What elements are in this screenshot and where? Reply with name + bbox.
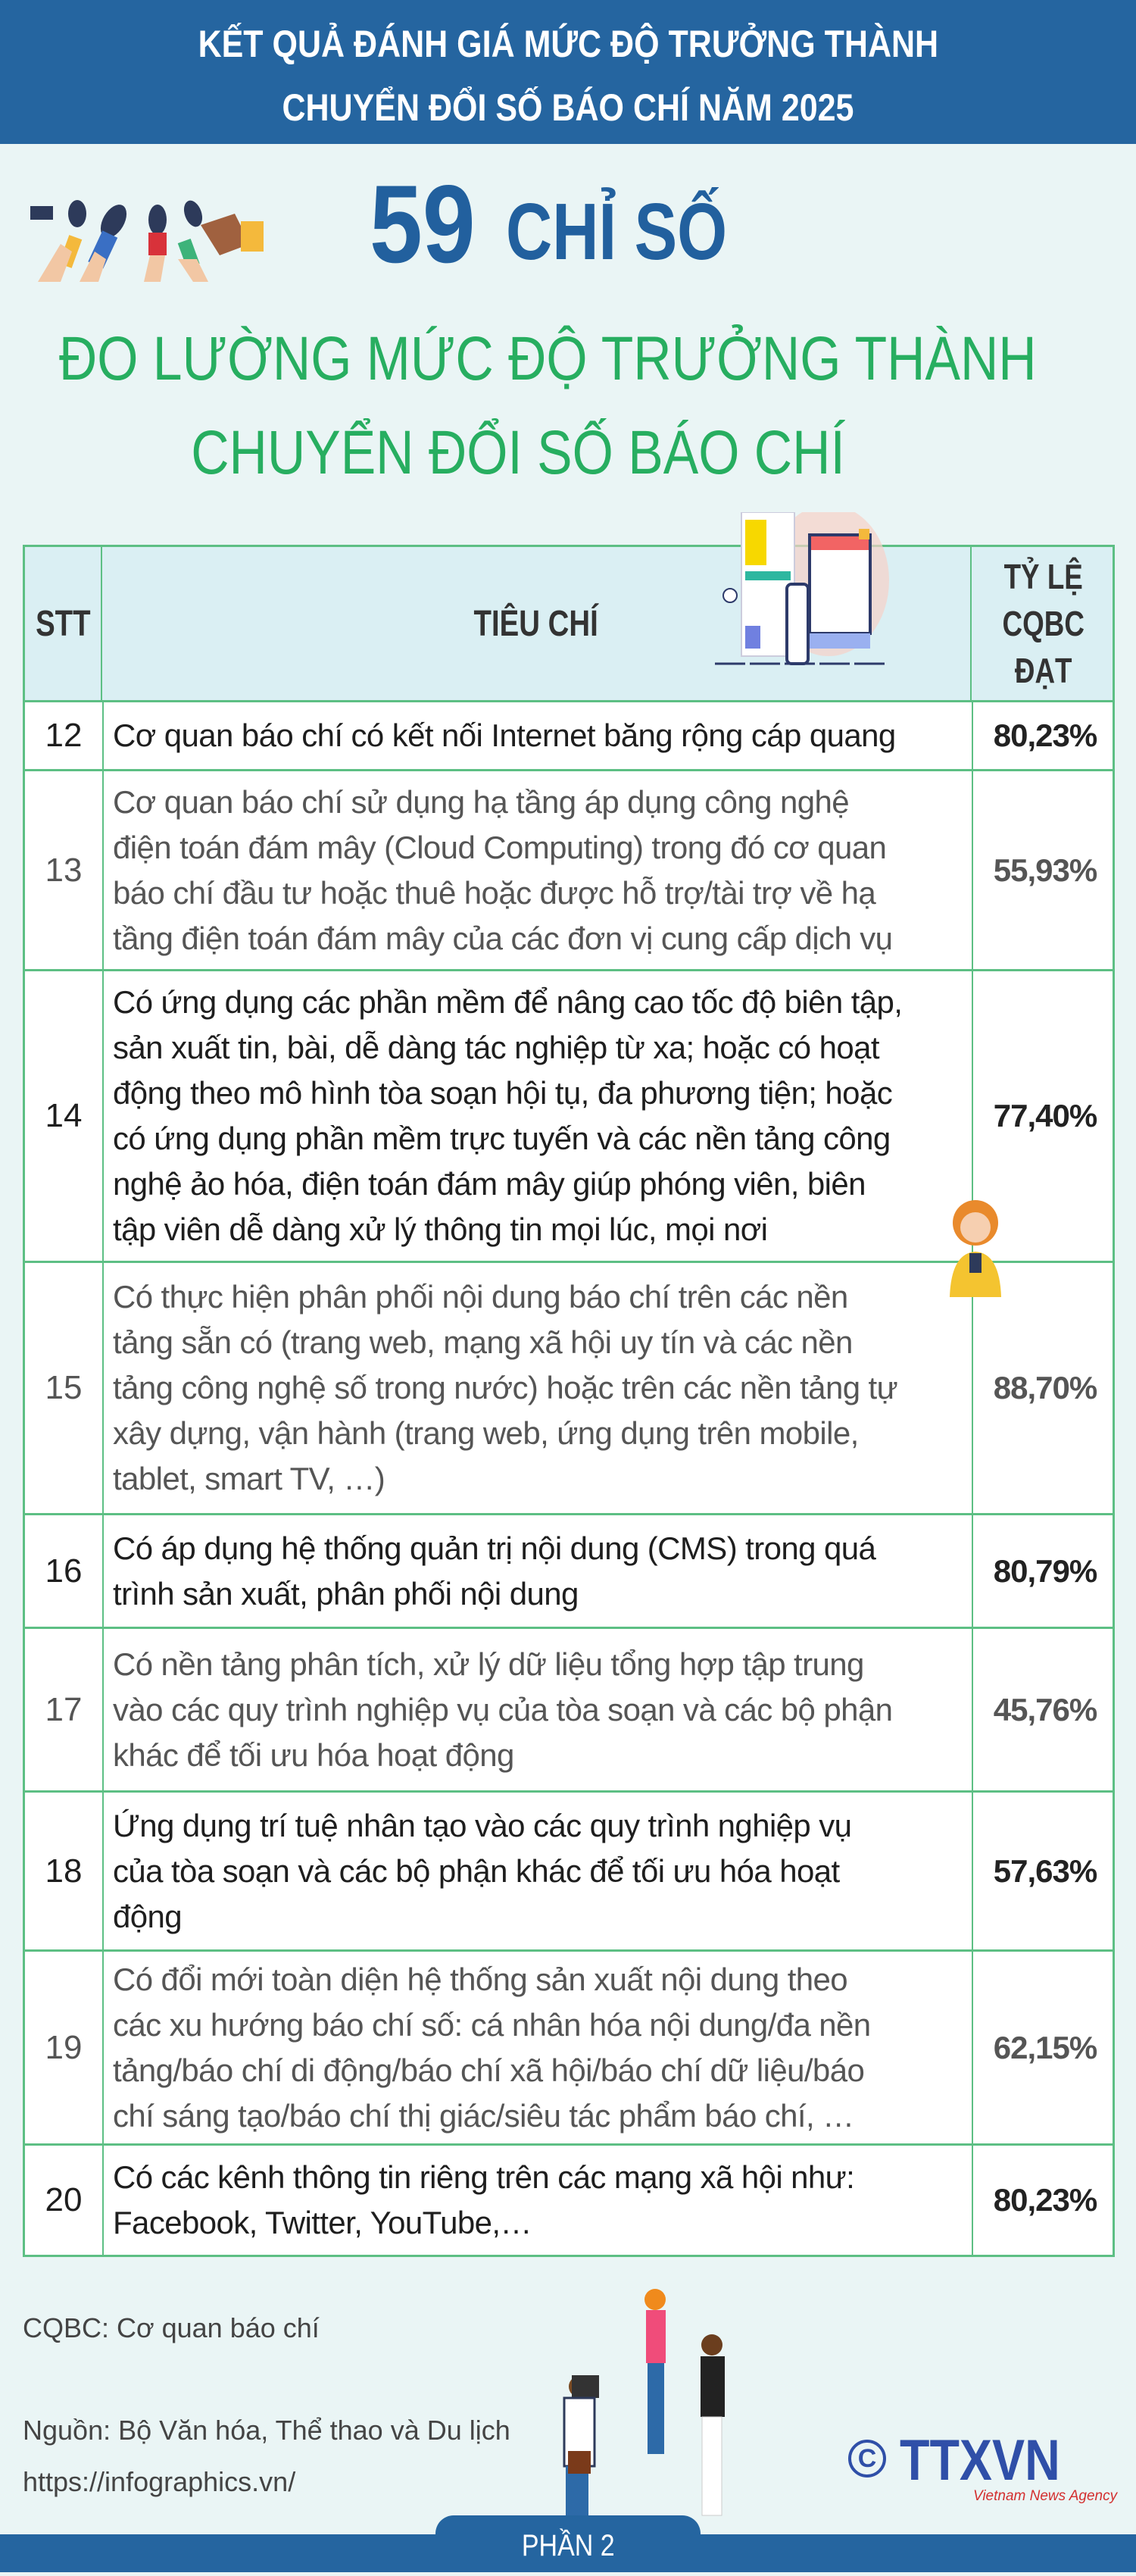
row 16: trình sản xuất, phân phối nội dung <box>113 1576 579 1611</box>
header: STT: STT <box>36 603 90 644</box>
row 19: 19 <box>45 2029 82 2065</box>
row 18: 18 <box>45 1852 82 1890</box>
subtitle green <box>59 324 1037 487</box>
source: Nguồn: Bộ Văn hóa, Thể thao và Du lịch <box>23 2415 510 2446</box>
row 12: 80,23% <box>994 717 1097 753</box>
row 20: Có các kênh thông tin riêng trên các mạng xã hội như: <box>113 2159 854 2195</box>
row 17 <box>23 1629 1115 1793</box>
row 17: Có nền tảng phân tích, xử lý dữ liệu tổng hợp tập trung <box>113 1646 864 1682</box>
title: 59 chỉ số <box>370 162 728 286</box>
row 20: 80,23% <box>994 2182 1097 2218</box>
header band <box>0 0 1136 144</box>
row 13: Cơ quan báo chí sử dụng hạ tầng áp dụng công nghệ <box>113 783 849 820</box>
icon: reporter woman <box>950 1200 1001 1297</box>
row 15: Có thực hiện phân phối nội dung báo chí trên các nền <box>113 1279 848 1315</box>
row 15: tảng sẵn có (trang web, mạng xã hội uy tín và các nền <box>113 1324 853 1360</box>
logo: TTXVN <box>848 2428 1118 2504</box>
row 18: 57,63% <box>994 1853 1097 1888</box>
header band: CHUYỂN ĐỔI SỐ BÁO CHÍ NĂM 2025 <box>282 86 854 129</box>
row 13: báo chí đầu tư hoặc thuê hoặc được hỗ trợ/tài trợ về hạ <box>113 874 875 911</box>
row 20 <box>23 2146 1115 2257</box>
row 19: Có đổi mới toàn diện hệ thống sản xuất nội dung theo <box>113 1961 847 1997</box>
row 13: tầng điện toán đám mây của các đơn vị cung cấp dịch vụ <box>113 920 892 956</box>
row 18: của tòa soạn và các bộ phận khác để tối ưu hóa hoạt <box>113 1853 840 1888</box>
header: TỶ LỆ CQBC ĐẠT: CQBC <box>1002 604 1085 643</box>
header band: KẾT QUẢ ĐÁNH GIÁ MỨC ĐỘ TRƯỞNG THÀNH <box>198 23 938 65</box>
row 12: Cơ quan báo chí có kết nối Internet băng rộng cáp quang <box>113 717 896 753</box>
row 14: nghệ ảo hóa, điện toán đám mây giúp phóng viên, biên <box>113 1166 866 1202</box>
row 15: 88,70% <box>994 1370 1097 1405</box>
row 17: 45,76% <box>994 1691 1097 1727</box>
row 14: 77,40% <box>994 1098 1097 1133</box>
row 14: tập viên dễ dàng xử lý thông tin mọi lúc, mọi nơi <box>113 1211 767 1247</box>
header: TỶ LỆ CQBC ĐẠT <box>970 547 1115 700</box>
logo: TTXVN: Vietnam News Agency <box>973 2488 1117 2504</box>
row 17: 17 <box>45 1691 82 1727</box>
tab: PHẦN 2: PHẦN 2 <box>522 2529 614 2562</box>
header: TỶ LỆ CQBC ĐẠT: ĐẠT <box>1015 651 1072 690</box>
row 13: 55,93% <box>994 852 1097 888</box>
logo: TTXVN: TTXVN <box>900 2428 1060 2493</box>
row 16 <box>23 1515 1115 1629</box>
subtitle green: CHUYỂN ĐỔI SỐ BÁO CHÍ <box>191 418 845 487</box>
title: 59 chỉ số: CHỈ SỐ <box>506 187 728 277</box>
icon: journalists <box>563 2289 725 2515</box>
row 16: 16 <box>45 1552 82 1590</box>
header: STT <box>25 547 102 700</box>
row 14: 14 <box>45 1097 82 1134</box>
source: https://infographics.vn/ <box>23 2466 295 2497</box>
row 15 <box>23 1263 1115 1515</box>
subtitle green: ĐO LƯỜNG MỨC ĐỘ TRƯỞNG THÀNH <box>59 324 1037 393</box>
row 17: khác để tối ưu hóa hoạt động <box>113 1737 514 1773</box>
row 18: Ứng dụng trí tuệ nhân tạo vào các quy trình nghiệp vụ <box>113 1808 851 1843</box>
icon: devices <box>715 512 889 665</box>
row 15: tảng công nghệ số trong nước) hoặc trên các nền tảng tự <box>113 1370 897 1405</box>
row 14 <box>23 971 1115 1263</box>
row 16: 80,79% <box>994 1553 1097 1588</box>
row 19: tảng/báo chí di động/báo chí xã hội/báo chí dữ liệu/báo <box>113 2052 864 2088</box>
row 18 <box>23 1793 1115 1952</box>
row 15: tablet, smart TV, …) <box>113 1461 385 1496</box>
row 20: Facebook, Twitter, YouTube,… <box>113 2205 532 2240</box>
header: TỶ LỆ CQBC ĐẠT: TỶ LỆ <box>1003 557 1083 596</box>
row 15: xây dựng, vận hành (trang web, ứng dụng trên mobile, <box>113 1415 859 1451</box>
row 13 <box>23 771 1115 971</box>
table header <box>23 545 1115 702</box>
row 14: có ứng dụng phần mềm trực tuyến và các nền tảng công <box>113 1121 891 1156</box>
row 12 <box>23 702 1115 771</box>
icon: microphones <box>30 200 264 282</box>
header: TIÊU CHÍ: TIÊU CHÍ <box>474 603 598 644</box>
row 17: vào các quy trình nghiệp vụ của tòa soạn và các bộ phận <box>113 1691 892 1727</box>
footnote: CQBC: Cơ quan báo chí <box>23 2312 320 2343</box>
row 14: sản xuất tin, bài, dễ dàng tác nghiệp từ xa; hoặc có hoạt <box>113 1030 879 1065</box>
row 19: 62,15% <box>994 2029 1097 2065</box>
logo: TTXVN: C <box>858 2444 876 2473</box>
bottom bar <box>0 2534 1136 2572</box>
row 19 <box>23 1952 1115 2146</box>
row 15: 15 <box>45 1369 82 1406</box>
row 14: Có ứng dụng các phần mềm để nâng cao tốc độ biên tập, <box>113 984 902 1020</box>
row 18: động <box>113 1899 182 1934</box>
row 19: chí sáng tạo/báo chí thị giác/siêu tác phẩm báo chí, … <box>113 2097 854 2134</box>
title: 59 chỉ số: 59 <box>370 162 476 286</box>
row 13: điện toán đám mây (Cloud Computing) trong đó cơ quan <box>113 829 886 865</box>
row 13: 13 <box>45 852 82 888</box>
tab: PHẦN 2 <box>435 2515 701 2572</box>
row 20: 20 <box>45 2181 82 2218</box>
row 12: 12 <box>45 717 82 754</box>
row 19: các xu hướng báo chí số: cá nhân hóa nội dung/đa nền <box>113 2006 871 2043</box>
row 14: động theo mô hình tòa soạn hội tụ, đa phương tiện; hoặc <box>113 1075 892 1111</box>
source <box>23 2415 510 2497</box>
row 16: Có áp dụng hệ thống quản trị nội dung (CMS) trong quá <box>113 1530 875 1565</box>
